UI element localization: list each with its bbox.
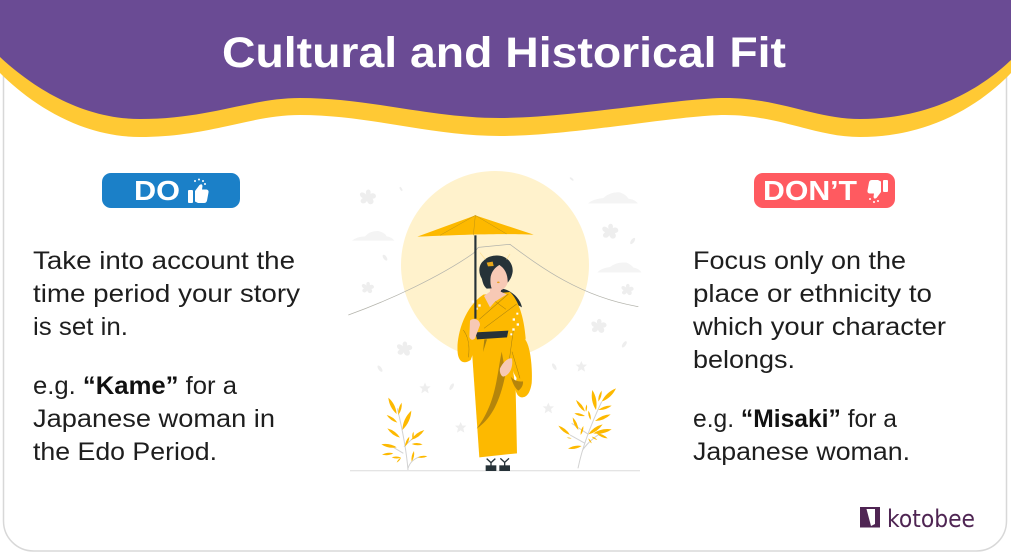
right column text: belongs.: [693, 346, 795, 374]
left column text: the Edo Period.: [33, 438, 217, 466]
DO badge: DO: [134, 175, 180, 206]
hair: [479, 256, 513, 289]
DON'T badge: DON’T: [763, 175, 857, 206]
sun circle: [401, 171, 589, 359]
kotobee logo: kotobee: [887, 505, 975, 533]
header wave: yellow band: [0, 57, 1011, 137]
left column text: [33, 247, 301, 466]
umbrella canopy: [417, 215, 534, 237]
mountain outline: [348, 244, 638, 315]
left column text: e.g. “Kame” for a: [33, 372, 237, 400]
kimono upper body and sleeves: [457, 292, 526, 381]
kimono fold shadow: [477, 352, 506, 429]
icon: thumbs down: [867, 180, 888, 203]
left column text: is set in.: [33, 313, 128, 341]
sandals: [486, 457, 510, 471]
left column text: Take into account the: [33, 247, 295, 275]
kimono patterns: [472, 300, 519, 335]
left plant: [381, 398, 427, 470]
DO badge: [102, 173, 240, 208]
ground line: [350, 470, 640, 471]
right column text: place or ethnicity to: [693, 280, 932, 308]
right column text: which your character: [692, 313, 946, 341]
left column text: time period your story: [33, 280, 301, 308]
title: Cultural and Historical Fit: [222, 29, 786, 77]
lower hand: [500, 358, 512, 377]
right column text: Focus only on the: [693, 247, 906, 275]
right column text: Japanese woman.: [693, 438, 910, 466]
illustration: woman in kimono with umbrella: [348, 171, 641, 471]
kimono fold lines: [463, 294, 520, 378]
header wave: purple band: [0, 0, 1011, 119]
sleeve inner shadow: [511, 377, 523, 391]
woman figure: [417, 215, 534, 471]
face: [490, 266, 508, 290]
hair tail: [500, 288, 522, 307]
background flowers, clouds and petals: [352, 177, 641, 433]
icon: book: [860, 507, 880, 528]
lips: [497, 281, 500, 283]
umbrella pole: [474, 235, 476, 319]
upper hand: [469, 319, 480, 340]
neck and chest: [484, 285, 507, 307]
obi belt: [475, 331, 508, 339]
DON'T badge: [754, 173, 895, 208]
hair pin: [487, 262, 494, 266]
right plant: [558, 388, 616, 468]
right column text: [692, 247, 946, 466]
left column text: Japanese woman in: [33, 405, 275, 433]
right column text: e.g. “Misaki” for a: [693, 405, 897, 433]
icon: thumbs up: [188, 178, 209, 203]
back sleeve: [515, 338, 532, 397]
umbrella ribs: [440, 215, 507, 235]
kimono lower body: [472, 337, 517, 457]
